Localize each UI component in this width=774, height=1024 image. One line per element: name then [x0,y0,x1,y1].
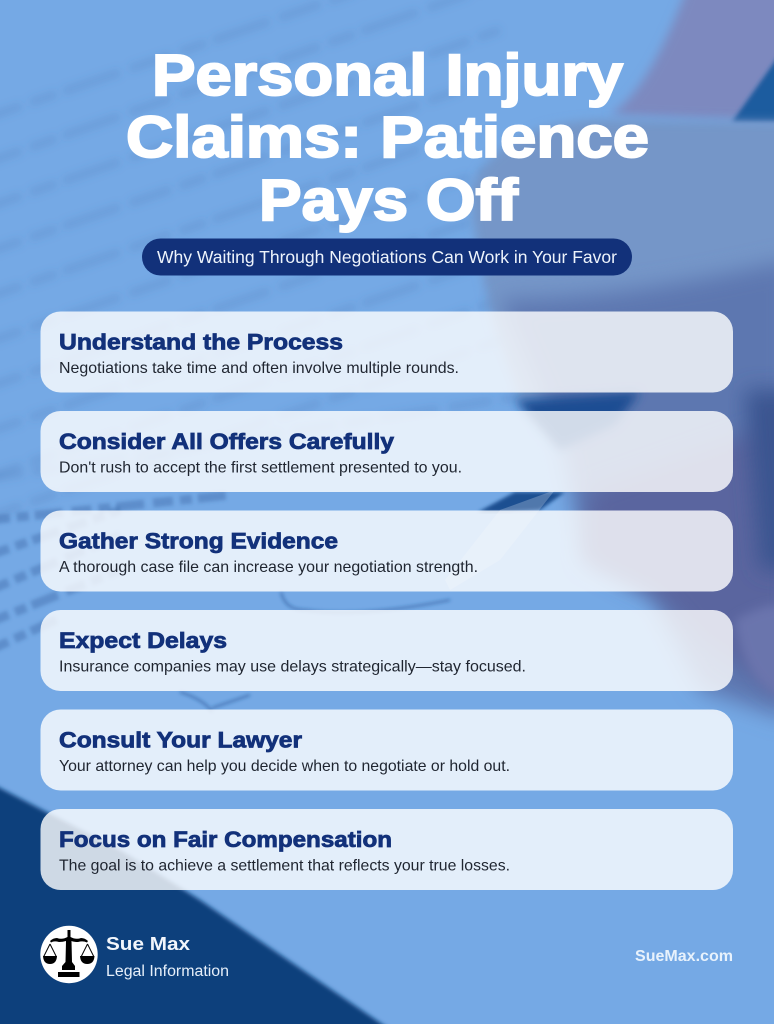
card: understand the process: Understand the Process [59,330,343,354]
card: understand the process: Negotiations take time and often involve multiple rounds. [59,360,459,377]
signature [180,592,450,712]
card: gather strong evidence [40,510,733,592]
card: consider all offers [40,411,733,492]
website: SueMax.com [635,948,733,965]
card: consult your lawyer: Consult Your Lawyer [59,728,302,752]
card: expect delays: Insurance companies may use delays strategically—stay focused. [59,658,526,676]
card: consult your lawyer [40,710,733,790]
card: consider all offers: Consider All Offers Carefully [59,429,395,454]
title: Pays Off [259,168,519,233]
subtitle pill: Why Waiting Through Negotiations Can Work in Your Favor [157,247,617,267]
card: understand the process [40,312,733,392]
card: consider all offers: Don't rush to accept the first settlement presented to you. [59,460,462,476]
pen [445,392,640,590]
card: consult your lawyer: Your attorney can help you decide when to negotiate or hold out. [59,758,510,775]
document text lines [0,0,530,520]
sharper document lines lower left [0,495,230,650]
card: gather strong evidence: A thorough case file can increase your negotiation strength. [59,559,478,576]
brand tagline: Legal Information [106,963,229,980]
dark corner [0,772,420,1024]
icon: scales of justice logo [40,926,98,983]
subtitle pill [142,238,632,276]
title: Personal Injury [152,43,623,108]
card: fair compensation: The goal is to achieve a settlement that reflects your true losses. [59,858,510,874]
card: expect delays [40,610,733,691]
card: expect delays: Expect Delays [59,628,227,653]
card: gather strong evidence: Gather Strong Evidence [59,528,338,554]
title [126,43,649,233]
brand name: Sue Max [106,933,191,954]
card: fair compensation: Focus on Fair Compensation [59,827,392,852]
hand and fingers [470,0,774,720]
title: Claims: Patience [126,105,649,170]
card: fair compensation [40,809,733,890]
